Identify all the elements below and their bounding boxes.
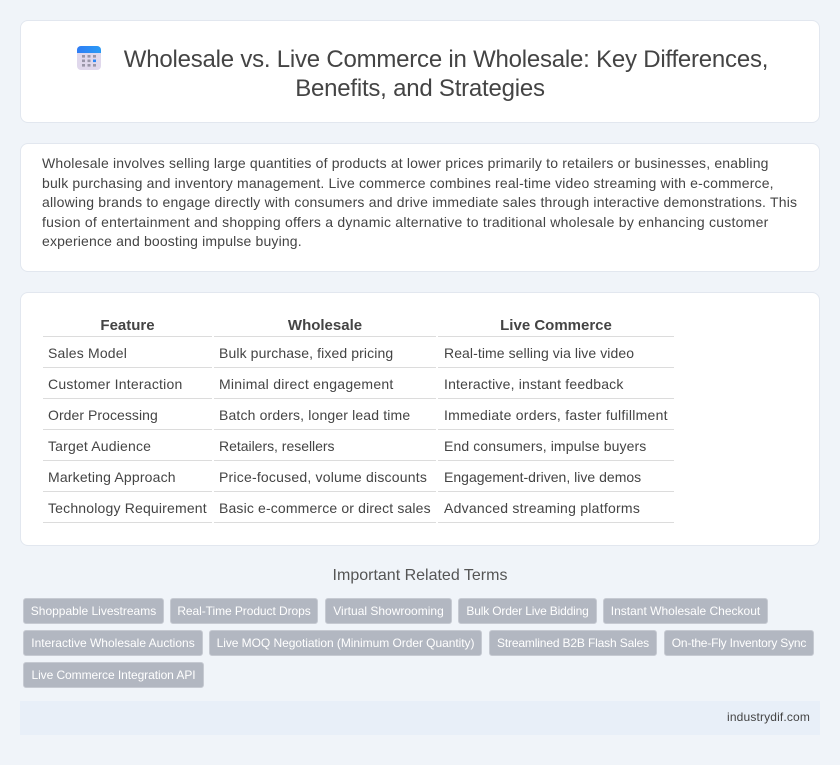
- row: Customer Interaction: [48, 376, 624, 392]
- tag: [458, 598, 597, 624]
- tag: Interactive Wholesale Auctions: [31, 636, 195, 650]
- intro paragraph: fusion of entertainment and shopping offers a dynamic alternative to traditional wholesale by enhancing customer: [42, 214, 768, 230]
- row: Sales Model: Bulk purchase, fixed pricing: [219, 345, 393, 361]
- tag: [170, 598, 318, 624]
- tag: Live MOQ Negotiation (Minimum Order Quantity): [217, 636, 474, 650]
- row: Sales Model: Real-time selling via live video: [444, 345, 634, 361]
- row: Order Processing: [48, 407, 668, 423]
- row: Marketing Approach: Engagement-driven, live demos: [444, 469, 641, 485]
- row: Technology Requirement: [48, 500, 640, 516]
- tag: Virtual Showrooming: [333, 604, 444, 618]
- row: Technology Requirement: Basic e-commerce or direct sales: [219, 500, 431, 516]
- tag: Shoppable Livestreams: [31, 604, 156, 618]
- row: Technology Requirement: Technology Requirement: [48, 500, 207, 516]
- row: Sales Model: Sales Model: [48, 345, 127, 361]
- intro paragraph: bulk purchasing and inventory management. Live commerce combines real-time video streaming with e-commerce,: [42, 175, 774, 191]
- title: Benefits, and Strategies: [295, 75, 545, 102]
- row: Customer Interaction: Customer Interaction: [48, 376, 183, 392]
- panel: intro text card: [20, 143, 820, 272]
- footer text: industrydif.com: [727, 710, 810, 724]
- row: Order Processing: Immediate orders, faster fulfillment: [444, 407, 668, 423]
- row: Technology Requirement: Advanced streaming platforms: [444, 500, 640, 516]
- row: Customer Interaction: Minimal direct engagement: [219, 376, 394, 392]
- row: Customer Interaction: Interactive, instant feedback: [444, 376, 624, 392]
- title: Wholesale vs. Live Commerce in Wholesale: Key Differences,: [124, 46, 768, 73]
- row: Target Audience: [48, 438, 646, 454]
- title: [124, 46, 768, 102]
- tag: [325, 598, 452, 624]
- heading: Important Related Terms: Important Related Terms: [333, 567, 507, 584]
- row: Sales Model: [48, 345, 634, 361]
- tag: [23, 598, 164, 624]
- tag: Streamlined B2B Flash Sales: [497, 636, 649, 650]
- table header: Wholesale: Wholesale: [288, 317, 362, 334]
- footer bar: [20, 701, 820, 735]
- tag: [664, 630, 814, 656]
- table header: Live Commerce: Live Commerce: [500, 317, 612, 334]
- tag: [603, 598, 768, 624]
- intro paragraph: experience and boosting impulse buying.: [42, 233, 302, 249]
- row: Target Audience: End consumers, impulse buyers: [444, 438, 646, 454]
- row: Order Processing: Batch orders, longer lead time: [219, 407, 410, 423]
- icon: calendar: [77, 46, 101, 70]
- row: Marketing Approach: Marketing Approach: [48, 469, 176, 485]
- table header: Feature: Feature: [100, 317, 155, 334]
- tag: [489, 630, 657, 656]
- row: Marketing Approach: Price-focused, volume discounts: [219, 469, 427, 485]
- row: Marketing Approach: [48, 469, 641, 485]
- intro paragraph: Wholesale involves selling large quantities of products at lower prices primarily to retailers or businesses, enabling: [42, 155, 769, 171]
- tag: On-the-Fly Inventory Sync: [672, 636, 806, 650]
- comparison table: [43, 317, 674, 523]
- row: Target Audience: Retailers, resellers: [219, 438, 335, 454]
- row: Order Processing: Order Processing: [48, 407, 158, 423]
- intro paragraph: allowing brands to engage directly with consumers and drive immediate sales through interactive demonstrations. This: [42, 194, 797, 210]
- row: Target Audience: Target Audience: [48, 438, 151, 454]
- tag: [209, 630, 482, 656]
- related terms tags: [23, 598, 814, 688]
- tag: Real-Time Product Drops: [177, 604, 311, 618]
- panel: title card: [20, 20, 820, 123]
- tag: [23, 662, 204, 688]
- tag: Bulk Order Live Bidding: [466, 604, 589, 618]
- tag: [23, 630, 203, 656]
- panel: comparison table card: [20, 292, 820, 546]
- intro paragraph: [42, 155, 797, 249]
- tag: Live Commerce Integration API: [31, 668, 196, 682]
- tag: Instant Wholesale Checkout: [611, 604, 760, 618]
